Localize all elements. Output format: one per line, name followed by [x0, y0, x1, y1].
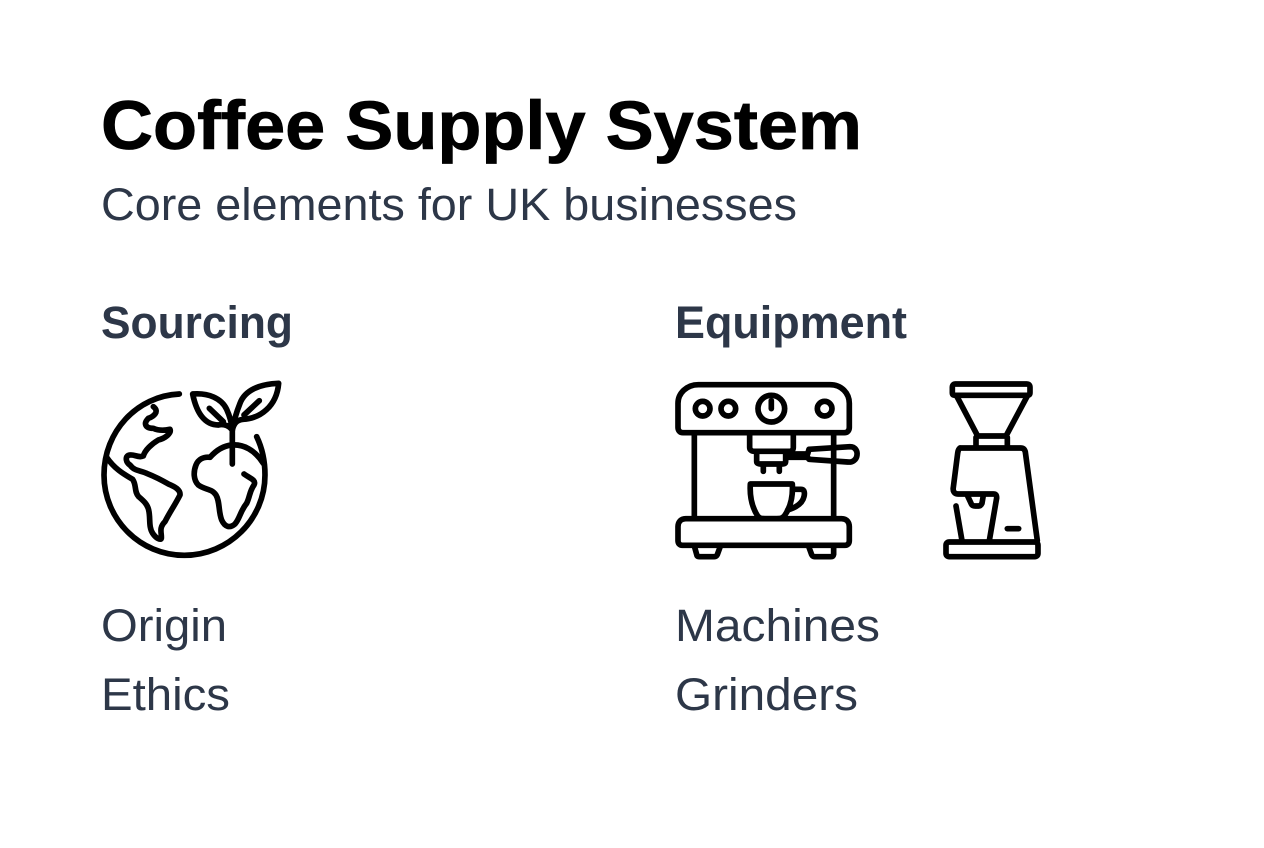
icon: coffee grinder — [946, 384, 1038, 557]
machine top panel — [678, 385, 849, 433]
icon: espresso machine — [678, 385, 857, 557]
list: sourcing items: Origin — [101, 600, 227, 651]
group head and portafilter — [750, 433, 857, 471]
grinder body — [953, 448, 1037, 541]
icon: globe with sprouting plant — [104, 383, 279, 555]
drip tray base — [678, 519, 849, 545]
feet — [694, 546, 834, 557]
control dials — [695, 395, 832, 422]
power button — [1007, 520, 1019, 537]
portafilter cup — [956, 506, 962, 541]
list: equipment items: Machines — [675, 600, 880, 651]
title: Coffee Supply System — [101, 87, 862, 164]
machine body columns — [694, 433, 834, 518]
base — [946, 542, 1038, 557]
list: equipment items: Grinders — [675, 669, 858, 720]
heading: sourcing: Sourcing — [101, 297, 293, 348]
heading: equipment: Equipment — [675, 297, 907, 348]
list: equipment items — [675, 600, 880, 720]
subtitle: Core elements for UK businesses — [101, 179, 797, 230]
list: sourcing items: Ethics — [101, 669, 230, 720]
hopper funnel — [957, 396, 1027, 436]
coffee cup — [750, 484, 804, 519]
hopper lid — [952, 384, 1030, 395]
list: sourcing items — [101, 600, 230, 720]
spout — [967, 495, 983, 506]
hopper neck — [976, 437, 1007, 447]
